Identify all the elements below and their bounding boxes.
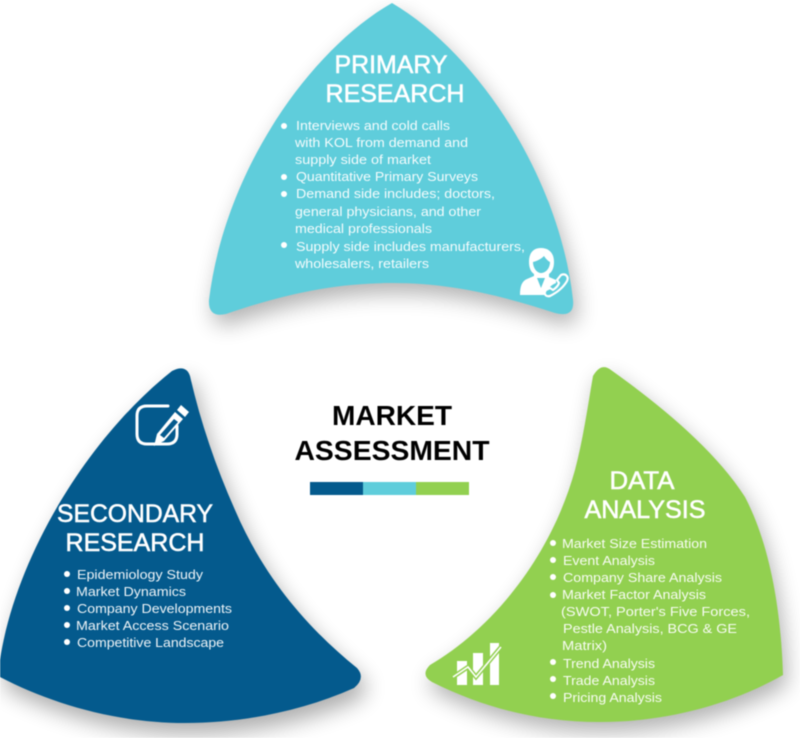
bullet list: data analysis: Market Factor Analysis (562, 587, 707, 602)
bullet list: primary research: Interviews and cold calls (296, 118, 451, 133)
bullet list: data analysis: Company Share Analysis (563, 570, 723, 585)
tricolor bar (310, 482, 469, 495)
bullet list: data analysis: (SWOT, Porter's Five Forces, (561, 604, 750, 619)
heading: primary research (326, 51, 464, 108)
bullet list: primary research: Demand side includes; doctors, (296, 186, 495, 201)
bullet list: data analysis (550, 536, 750, 705)
bullet list: data analysis: Pestle Analysis, BCG & GE (563, 621, 737, 636)
heading: secondary research: RESEARCH (66, 529, 204, 557)
bullet list: data analysis: Trend Analysis (563, 656, 656, 671)
bullet list: primary research: Quantitative Primary Surveys (296, 169, 479, 184)
center title: ASSESSMENT (294, 435, 490, 466)
bullet list: data analysis: Pricing Analysis (563, 690, 663, 705)
icon: pencil on note (137, 405, 189, 446)
bullet list: data analysis: Market Size Estimation (562, 536, 707, 551)
heading: secondary research: SECONDARY (57, 500, 213, 528)
bullet list: primary research: Supply side includes manufacturers, (296, 239, 525, 254)
heading: secondary research (57, 500, 213, 557)
bullet list: secondary research (64, 567, 233, 650)
panel shape: secondary research (0, 368, 361, 723)
bullet list: secondary research: Market Dynamics (76, 584, 187, 599)
bullet list: secondary research: Competitive Landscape (77, 635, 224, 650)
bullet list: secondary research: Market Access Scenario (76, 618, 229, 633)
bullet list: data analysis: Matrix) (562, 638, 607, 653)
heading: data analysis: ANALYSIS (584, 496, 706, 524)
bullet list: primary research: medical professionals (295, 221, 433, 236)
heading: primary research: RESEARCH (326, 80, 464, 108)
panel: data analysis (425, 367, 787, 732)
bullet list: secondary research: Company Developments (77, 601, 233, 616)
bullet list: data analysis: Trade Analysis (563, 673, 656, 688)
panel: primary research (209, 3, 577, 325)
bullet list: primary research: wholesalers, retailers (294, 256, 430, 271)
panel shape: primary research (209, 3, 573, 315)
center title: MARKET (332, 400, 452, 431)
bullet list: secondary research: Epidemiology Study (77, 567, 204, 582)
panel: secondary research (0, 368, 366, 734)
bullet list: primary research: general physicians, and other (295, 204, 482, 219)
heading: data analysis: DATA (610, 467, 675, 495)
bullet list: primary research (281, 118, 525, 271)
icon: doctor with phone (520, 248, 568, 296)
bullet list: data analysis: Event Analysis (563, 553, 656, 568)
bullet list: primary research: supply side of market (295, 152, 431, 167)
icon: bar chart with trend line (453, 643, 501, 685)
center title (294, 400, 490, 466)
heading: primary research: PRIMARY (334, 51, 448, 79)
bullet list: primary research: with KOL from demand and (294, 135, 468, 150)
heading: data analysis (584, 467, 706, 524)
panel shape: data analysis (425, 367, 783, 722)
